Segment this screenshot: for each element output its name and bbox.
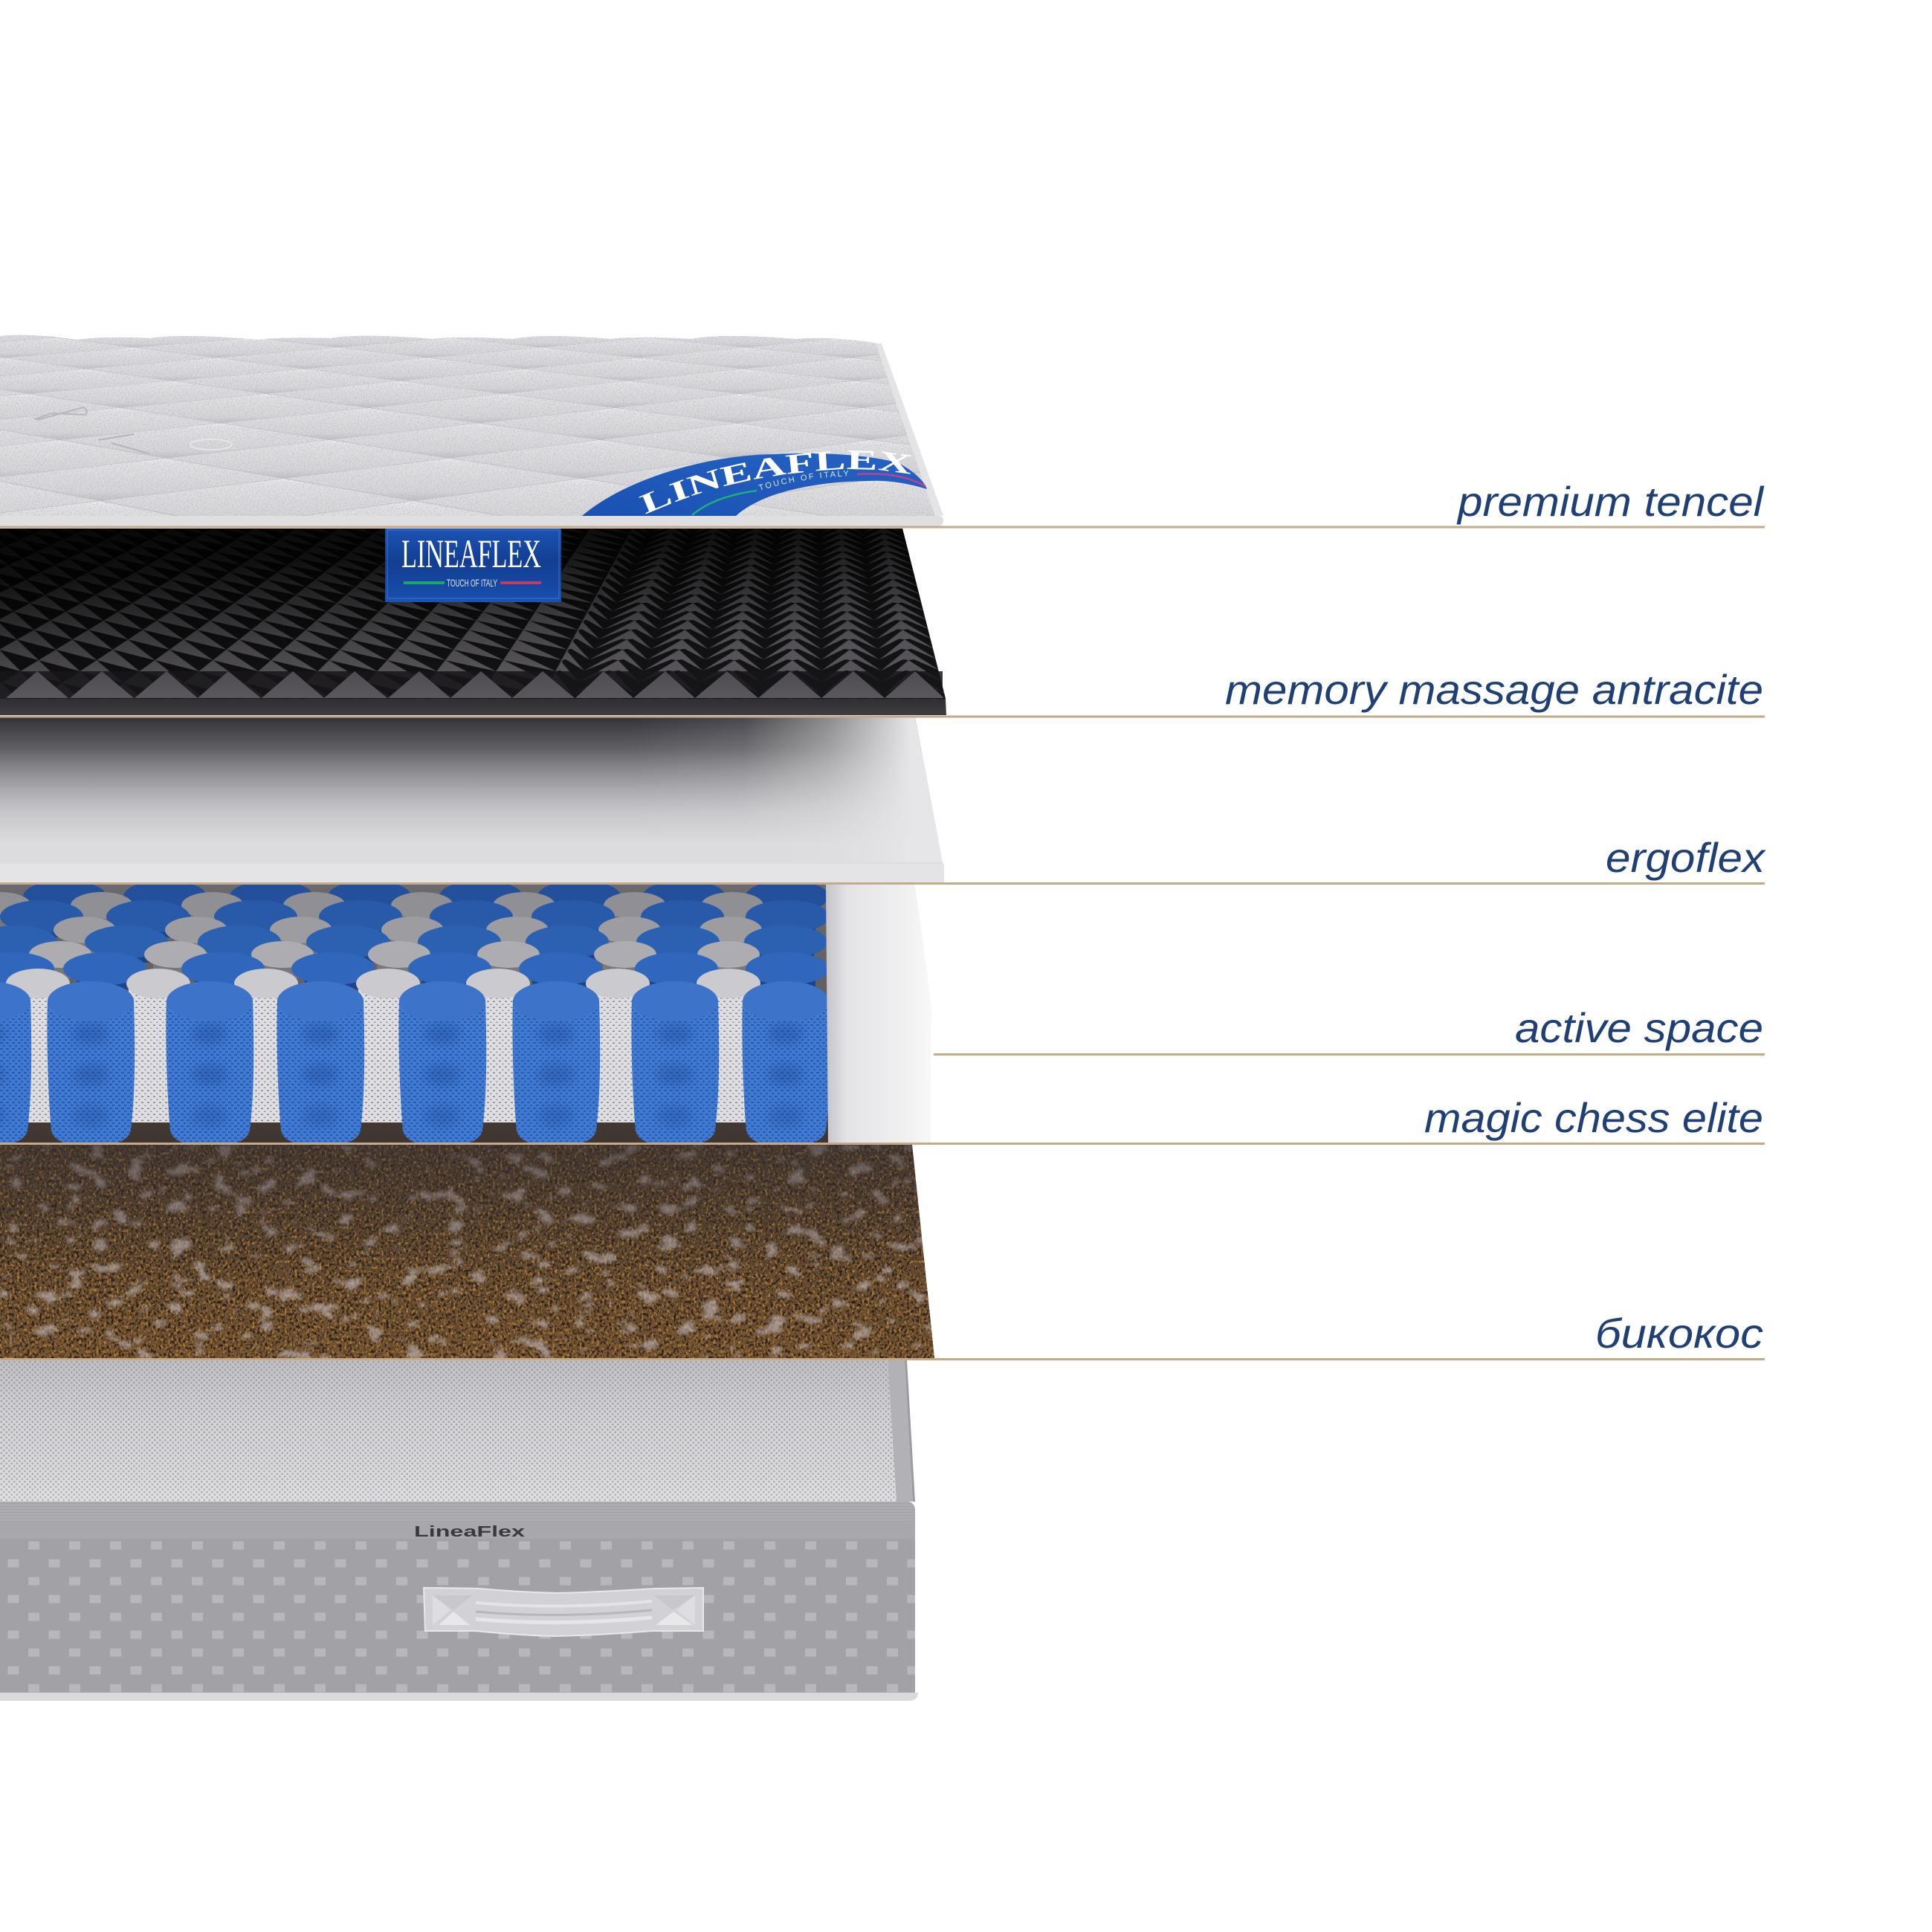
label: magic chess elite: [0, 1094, 1765, 1145]
label: ergoflex: [0, 834, 1766, 885]
panel: premium tencel quilted surface: [0, 335, 935, 516]
panel: bicoconut layer: [0, 1145, 937, 1360]
label: bicoconut: [0, 1310, 1765, 1360]
icon: handle: [424, 1588, 703, 1636]
icon: blue springs: [0, 981, 830, 1146]
panel: side foam of spring block: [826, 885, 931, 1143]
tencel fabric grain, rim and stitched marks: [0, 327, 966, 528]
label tag: LINEAFLEX: TOUCH OF ITALY: [447, 577, 497, 589]
icon: back spring rows: [0, 880, 829, 989]
blue ribbon logo on tencel: LINEAFLEX: [639, 450, 911, 514]
mattress cross-section and labels: [0, 335, 1766, 1701]
label tag: LINEAFLEX: [385, 529, 561, 602]
panel: active space pocket springs: [0, 880, 830, 1146]
memory foam shading and front side: [0, 529, 946, 715]
panel: base frame with mesh, band and handle: [0, 1360, 918, 1701]
icon: white springs: [6, 969, 760, 1122]
label: ergoflex: ergoflex: [1606, 834, 1766, 881]
panel: memory foam pyramid surface: [0, 529, 946, 699]
label: bicoconut: бикокос: [1595, 1310, 1763, 1357]
logo text on band: LineaFlex: [414, 1524, 525, 1540]
label: premium tencel: premium tencel: [1456, 478, 1765, 525]
label: memory massage antracite: memory massage antracite: [1225, 666, 1763, 713]
label: active space: active space: [1515, 1004, 1763, 1051]
panel: ergoflex foam layer: [0, 717, 944, 882]
label tag: LINEAFLEX: LINEAFLEX: [401, 532, 541, 576]
label: premium tencel: [0, 478, 1765, 528]
label: active space: [934, 1004, 1765, 1056]
blue ribbon logo on tencel: TOUCH OF ITALY: [758, 470, 849, 491]
blue ribbon logo on tencel: [582, 450, 927, 516]
label: memory massage antracite: [0, 666, 1765, 718]
label: magic chess elite: magic chess elite: [1424, 1094, 1763, 1141]
